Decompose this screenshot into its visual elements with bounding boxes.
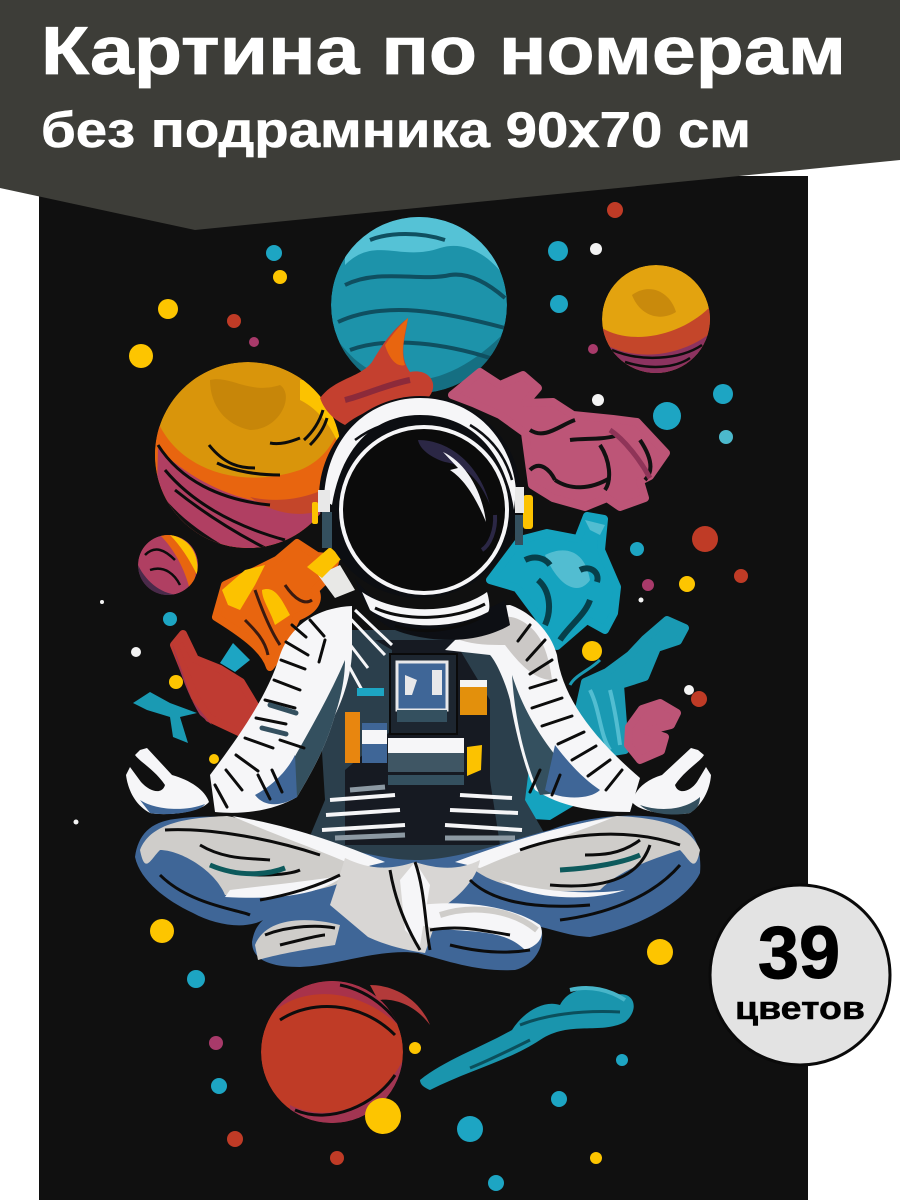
painting canvas (39, 176, 808, 1200)
astronaut: helmet (312, 396, 533, 598)
nebula: red behind helmet (320, 318, 433, 425)
astronaut: left arm (210, 606, 352, 813)
planet: small red orange (138, 535, 198, 600)
astronaut: torso (300, 610, 560, 860)
nebula: left red and teal (133, 634, 256, 743)
nebula: teal cloud (490, 516, 617, 646)
nebula: teal near right knee (513, 770, 575, 820)
badge: 39 colours: 39 (758, 911, 840, 994)
badge: 39 colours (710, 885, 890, 1065)
planet: red bottom (261, 975, 430, 1125)
astronaut: neck ring (307, 547, 510, 640)
astronaut: right arm (445, 605, 640, 812)
astronaut: legs (135, 816, 700, 970)
planet: teal (331, 217, 507, 393)
header banner (0, 0, 900, 230)
astronaut: left glove (126, 748, 209, 814)
astronaut: right glove (632, 748, 711, 814)
subtitle: без подрамника 90х70 см (41, 102, 751, 158)
planet: large orange (150, 362, 342, 560)
nebula: bottom teal smoke (420, 988, 634, 1090)
astronaut (126, 396, 711, 970)
planet: orange small (602, 265, 712, 375)
title: Картина по номерам (41, 13, 846, 89)
badge: 39 colours: цветов (735, 990, 865, 1026)
nebula: orange flame (216, 543, 336, 667)
nebula: pink cloud (452, 372, 666, 507)
astronaut: chest pack (345, 654, 487, 785)
stars and dots (74, 202, 748, 1191)
nebula: right teal swirl (570, 620, 685, 760)
